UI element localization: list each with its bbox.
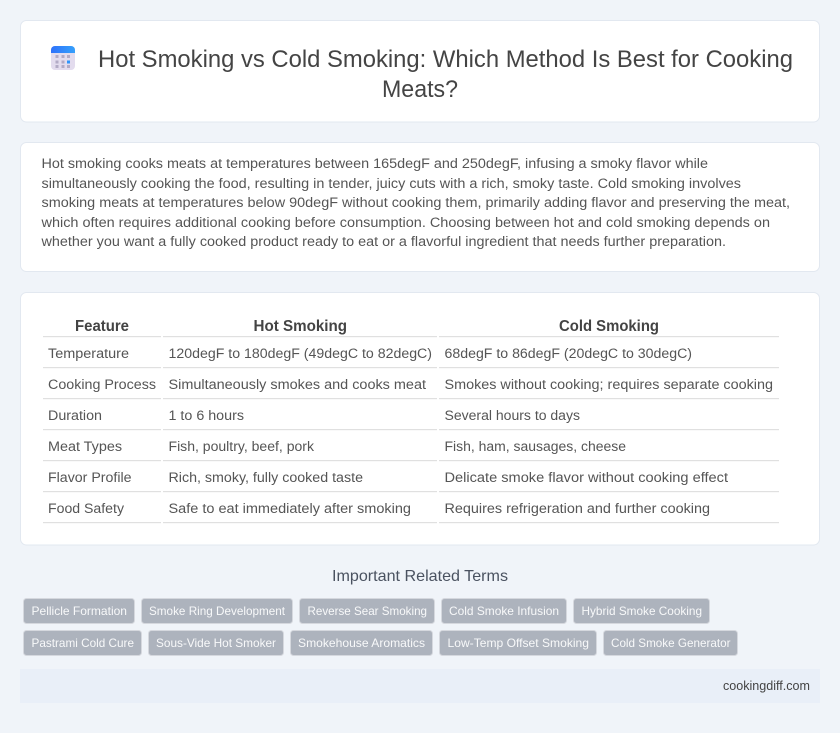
text block: summary: which often requires additional cooking before consumption. Choosing between hot and cold smoking depends on	[40, 215, 770, 231]
row: temperature: 68degF to 86degF (20degC to 30degC)	[444, 346, 692, 362]
row: duration: Duration	[48, 408, 102, 424]
row: food safety: Safe to eat immediately after smoking	[168, 501, 411, 517]
text block: summary: simultaneously cooking the food, resulting in tender, juicy cuts with a rich, smoky taste. Cold smoking involves	[42, 176, 741, 192]
row: duration: 1 to 6 hours	[168, 408, 244, 424]
table header	[75, 318, 659, 335]
tags: related terms: Low-Temp Offset Smoking	[448, 636, 589, 650]
tags: related terms: Cold Smoke Infusion	[449, 604, 559, 618]
table header: Feature	[75, 318, 129, 335]
row: cooking process: Simultaneously smokes and cooks meat	[168, 377, 426, 393]
tags: related terms: Smokehouse Aromatics	[298, 636, 425, 650]
row: flavor profile: Flavor Profile	[48, 470, 132, 486]
row: flavor profile	[48, 470, 728, 486]
tags: related terms: Sous-Vide Hot Smoker	[156, 636, 276, 650]
row: food safety: Food Safety	[48, 501, 125, 517]
panel: summary paragraph	[20, 142, 820, 272]
heading: related terms: Important Related Terms	[332, 568, 508, 585]
footer: cookingdiff.com	[723, 678, 810, 693]
tags: related terms: Smoke Ring Development	[149, 604, 286, 618]
tags: related terms: Pastrami Cold Cure	[32, 636, 134, 650]
row: duration	[48, 408, 580, 424]
row: temperature: Temperature	[48, 346, 129, 362]
row: meat types: Meat Types	[48, 439, 122, 455]
row: flavor profile: Rich, smoky, fully cooked taste	[168, 470, 363, 486]
table header: Hot Smoking	[254, 318, 347, 335]
row: temperature: 120degF to 180degF (49degC to 82degC)	[168, 346, 432, 362]
icon: calendar	[51, 46, 75, 70]
row: duration: Several hours to days	[444, 408, 580, 424]
text block: summary: whether you want a fully cooked product ready to eat or a flavorful ingredient that needs further preparation.	[40, 234, 726, 250]
text block: summary	[40, 156, 790, 250]
row: meat types	[48, 439, 626, 455]
title	[98, 46, 793, 103]
text block: summary: Hot smoking cooks meats at temperatures between 165degF and 250degF, infusing a smoky flavor while	[42, 156, 708, 172]
text block: summary: smoking meats at temperatures below 90degF without cooking them, primarily adding flavor and preserving the meat,	[42, 195, 790, 211]
row: cooking process	[48, 377, 773, 393]
row: food safety: Requires refrigeration and further cooking	[444, 501, 710, 517]
row: flavor profile: Delicate smoke flavor without cooking effect	[444, 470, 728, 486]
tags: related terms: Reverse Sear Smoking	[308, 604, 427, 618]
row: temperature	[48, 346, 692, 362]
table header: Cold Smoking	[559, 318, 659, 335]
panel: comparison table	[20, 292, 820, 545]
row: cooking process: Smokes without cooking; requires separate cooking	[444, 377, 773, 393]
title: Hot Smoking vs Cold Smoking: Which Method Is Best for Cooking	[98, 46, 793, 73]
title: Meats?	[382, 76, 458, 103]
row: food safety	[48, 501, 710, 517]
tags: related terms	[24, 598, 738, 656]
row: meat types: Fish, ham, sausages, cheese	[444, 439, 626, 455]
row: cooking process: Cooking Process	[48, 377, 156, 393]
footer	[20, 669, 820, 703]
tags: related terms: Cold Smoke Generator	[611, 636, 730, 650]
tags: related terms: Pellicle Formation	[32, 604, 127, 618]
panel: header	[20, 20, 820, 122]
tags: related terms: Hybrid Smoke Cooking	[582, 604, 702, 618]
row: meat types: Fish, poultry, beef, pork	[168, 439, 315, 455]
